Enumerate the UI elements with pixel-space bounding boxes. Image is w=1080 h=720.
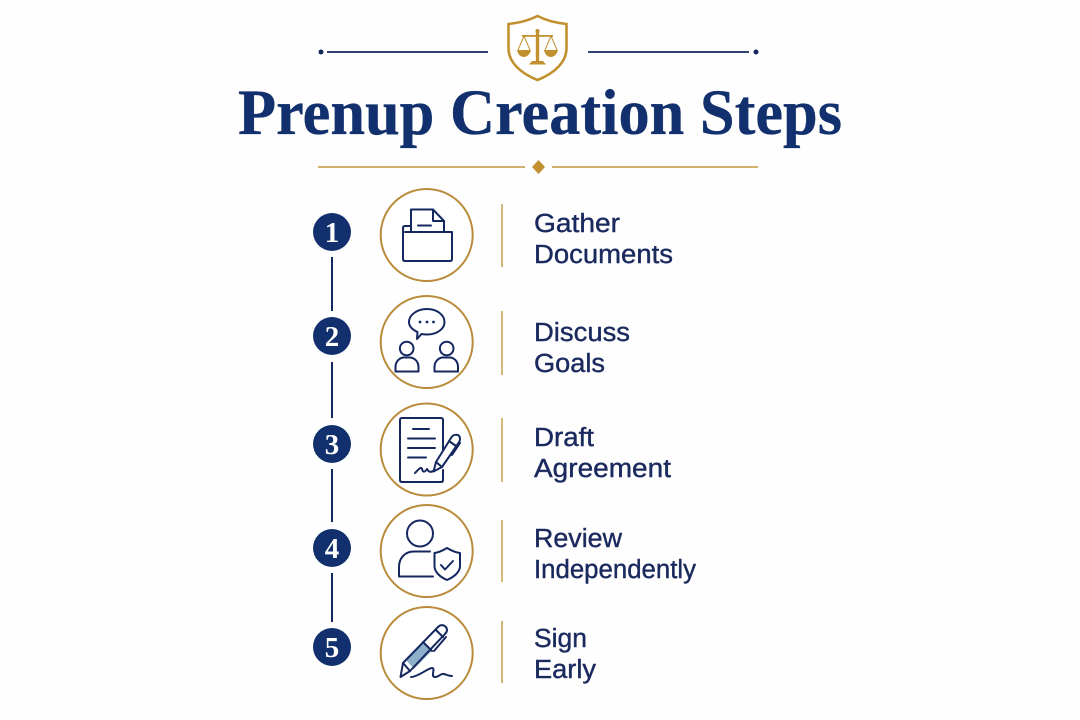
icon: two people talking xyxy=(381,296,473,388)
header ornament: left rule xyxy=(318,50,488,54)
number badge 2: 2 xyxy=(325,321,339,353)
label: Discuss Goals xyxy=(534,319,630,378)
vertical rule xyxy=(501,520,503,582)
title: Prenup Creation Steps xyxy=(238,76,842,149)
step 3 xyxy=(313,404,671,496)
label: Draft Agreement: Agreement xyxy=(534,455,671,483)
label: Draft Agreement: Draft xyxy=(534,424,594,452)
number badge 5: 5 xyxy=(325,632,339,664)
vertical rule xyxy=(501,311,503,375)
icon: document with pen xyxy=(381,404,473,496)
number badge 2 xyxy=(313,317,351,355)
label: Gather Documents: Documents xyxy=(534,241,673,269)
icon: shield with scales xyxy=(508,16,566,80)
step 5 xyxy=(313,607,596,699)
label: Sign Early xyxy=(534,625,596,684)
icon: pen signing xyxy=(381,607,473,699)
number badge 4 xyxy=(313,529,351,567)
icon: folder with document xyxy=(381,189,473,281)
label: Gather Documents: Gather xyxy=(534,210,621,238)
label: Sign Early: Early xyxy=(534,656,596,684)
step 1 xyxy=(313,189,673,281)
label: Discuss Goals: Goals xyxy=(534,350,605,378)
vertical rule xyxy=(501,621,503,683)
step 2 xyxy=(313,296,630,388)
step 4 xyxy=(313,505,696,597)
header ornament: right rule xyxy=(588,50,758,54)
number badge 4: 4 xyxy=(325,533,339,565)
timeline connectors xyxy=(331,257,333,622)
vertical rule xyxy=(501,204,503,267)
number badge 5 xyxy=(313,628,351,666)
label: Review Independently: Review xyxy=(534,525,623,553)
number badge 1 xyxy=(313,213,351,251)
title divider with diamond xyxy=(318,160,758,174)
label: Gather Documents xyxy=(534,210,673,269)
label: Draft Agreement xyxy=(534,424,671,483)
icon: person with shield xyxy=(381,505,473,597)
label: Review Independently xyxy=(534,525,696,584)
number badge 1: 1 xyxy=(325,217,339,249)
label: Discuss Goals: Discuss xyxy=(534,319,630,347)
label: Sign Early: Sign xyxy=(534,625,587,653)
number badge 3: 3 xyxy=(325,429,339,461)
label: Review Independently: Independently xyxy=(534,556,696,584)
number badge 3 xyxy=(313,425,351,463)
vertical rule xyxy=(501,418,503,482)
